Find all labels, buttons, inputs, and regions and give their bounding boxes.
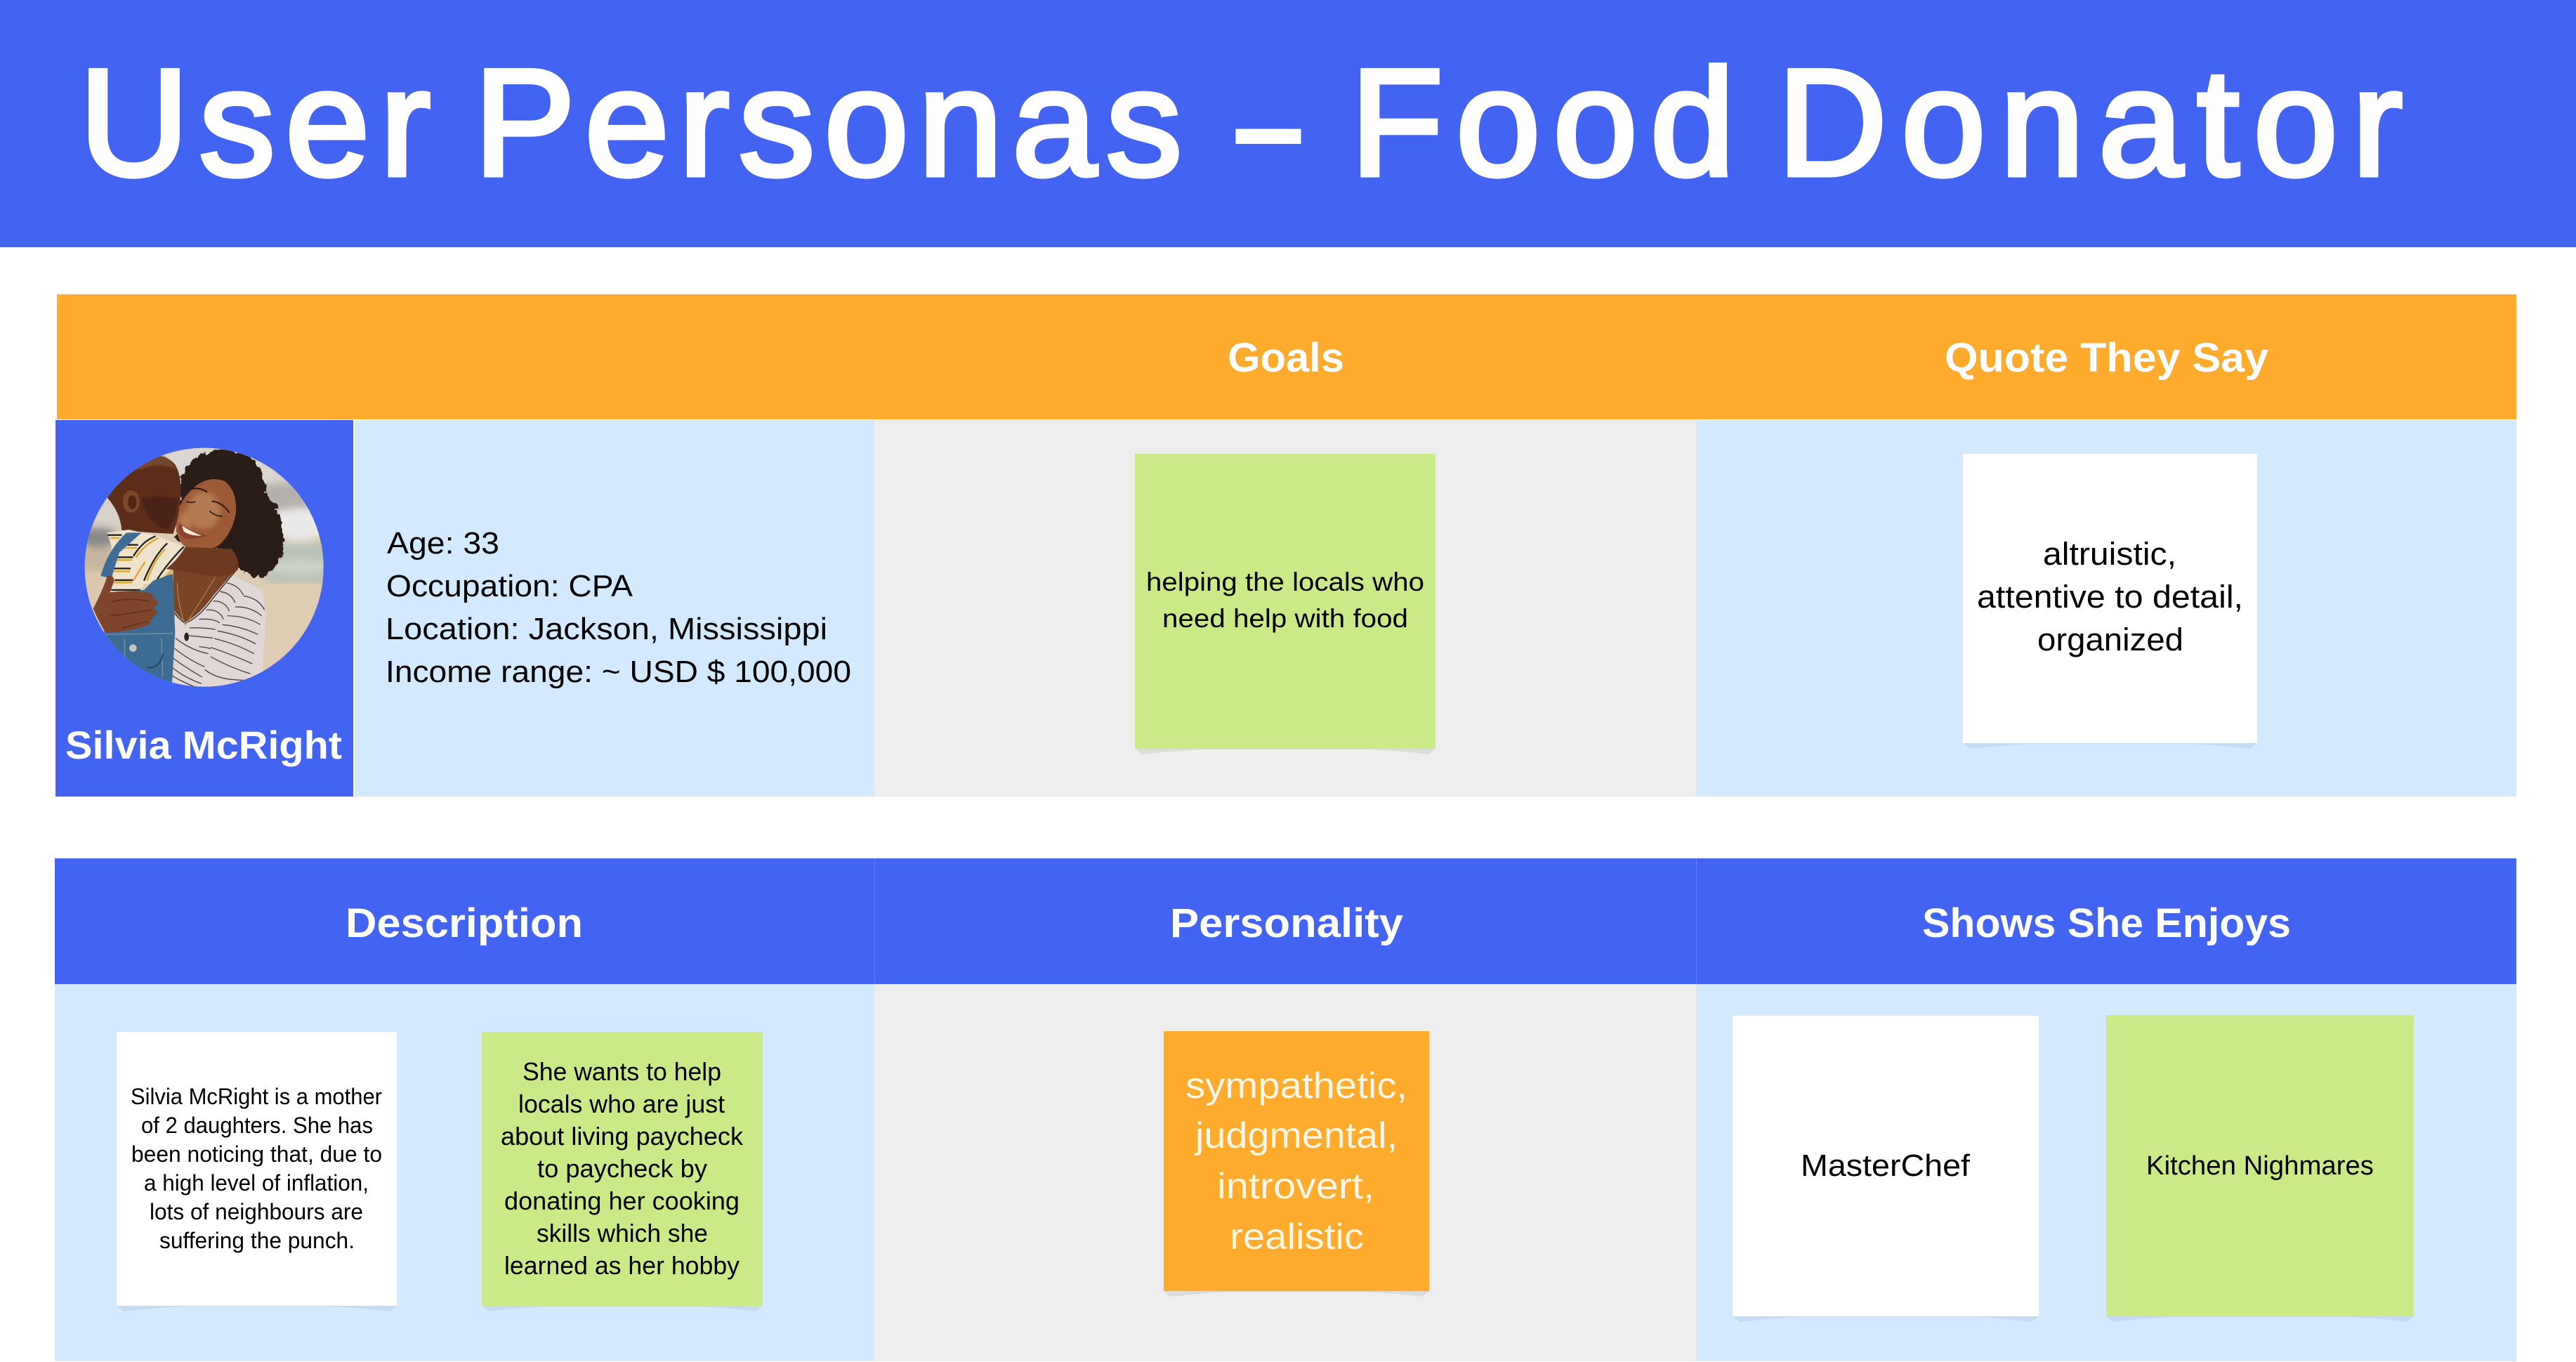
sticky note: personality traits: sympathetic, xyxy=(1185,1066,1407,1106)
woman neck and chest xyxy=(173,569,237,622)
title: User Personas – Food Donator: Donator xyxy=(1777,37,2403,207)
woman hand xyxy=(93,575,158,633)
demographic details: Occupation: CPA xyxy=(386,569,633,603)
heading: Quote They Say: Quote They Say xyxy=(1945,335,2268,381)
demographic details: Location: Jackson, Mississippi xyxy=(386,612,827,646)
sticky note: MasterChef xyxy=(1733,1016,2039,1322)
sticky note: description text: lots of neighbours are xyxy=(150,1199,363,1224)
sticky note: MasterChef: MasterChef xyxy=(1801,1148,1971,1183)
sticky note: goal: need help with food xyxy=(1162,604,1408,633)
demographic details: Age: 33 xyxy=(387,526,499,561)
panel: profile card xyxy=(55,420,353,797)
sticky note: motivation text: to paycheck by xyxy=(537,1154,707,1183)
heading: Goals: Goals xyxy=(1228,335,1344,381)
sticky note: motivation text: She wants to help xyxy=(523,1057,721,1086)
sticky note: personality traits xyxy=(1164,1031,1429,1297)
demographic details: Income range: ~ USD $ 100,000 xyxy=(386,655,851,689)
panel: quote xyxy=(1696,420,2516,797)
panel: description xyxy=(55,984,874,1361)
sticky note: description text: of 2 daughters. She has xyxy=(141,1113,373,1138)
photo: mother and son hugging xyxy=(84,448,324,687)
top row header bar xyxy=(57,294,2516,419)
title: User Personas – Food Donator: – xyxy=(1237,37,1300,207)
sticky note: quote xyxy=(1963,454,2257,749)
boy striped shirt xyxy=(107,530,185,594)
panel: personality xyxy=(874,984,1696,1361)
boy overalls xyxy=(100,532,175,683)
sticky note: personality traits: realistic xyxy=(1230,1217,1364,1257)
heading: Shows She Enjoys: Shows She Enjoys xyxy=(1922,901,2291,946)
heading: Personality: Personality xyxy=(1170,901,1403,946)
sticky note: motivation text: locals who are just xyxy=(518,1089,725,1118)
panel: demographics xyxy=(355,420,874,797)
panel: goals xyxy=(874,420,1696,797)
sticky note: description text xyxy=(117,1032,397,1311)
title: User Personas – Food Donator: Food xyxy=(1351,37,1735,207)
bottom row header bar xyxy=(55,858,2516,984)
sticky note: quote: organized xyxy=(2037,622,2183,657)
woman face xyxy=(176,479,236,551)
sticky note: goal xyxy=(1135,454,1435,754)
woman hair xyxy=(176,450,283,577)
boy arm xyxy=(166,547,239,576)
panel: shows she enjoys xyxy=(1696,984,2516,1361)
sticky note: motivation text: skills which she xyxy=(537,1219,708,1248)
sticky note: Kitchen Nighmares: Kitchen Nighmares xyxy=(2146,1151,2374,1181)
title: User Personas – Food Donator: Personas xyxy=(474,37,1182,207)
sticky note: description text: a high level of inflation, xyxy=(144,1170,369,1196)
sticky note: quote: altruistic, xyxy=(2043,536,2176,572)
sticky note: description text: Silvia McRight is a mother xyxy=(131,1084,382,1109)
persona name: Silvia McRight xyxy=(65,723,342,767)
sticky note: goal: helping the locals who xyxy=(1146,568,1424,596)
demographic details xyxy=(386,526,851,689)
sticky note: motivation text: about living paycheck xyxy=(501,1122,744,1151)
sticky note: quote: attentive to detail, xyxy=(1977,579,2243,615)
title: User Personas – Food Donator xyxy=(79,37,2403,207)
sticky note: motivation text xyxy=(482,1032,763,1311)
sticky note: Kitchen Nighmares xyxy=(2106,1015,2414,1322)
sticky note: description text: suffering the punch. xyxy=(159,1228,355,1253)
title: User Personas – Food Donator: User xyxy=(79,37,431,207)
sticky note: personality traits: introvert, xyxy=(1217,1166,1374,1207)
sticky note: motivation text: learned as her hobby xyxy=(504,1251,740,1280)
woman shirt xyxy=(169,571,266,690)
sticky note: motivation text: donating her cooking xyxy=(504,1186,740,1215)
sticky note: description text: been noticing that, due to xyxy=(131,1141,382,1167)
title banner xyxy=(0,0,2576,247)
sticky note: personality traits: judgmental, xyxy=(1194,1115,1398,1156)
heading: Description: Description xyxy=(346,901,583,946)
boy head xyxy=(107,456,180,534)
